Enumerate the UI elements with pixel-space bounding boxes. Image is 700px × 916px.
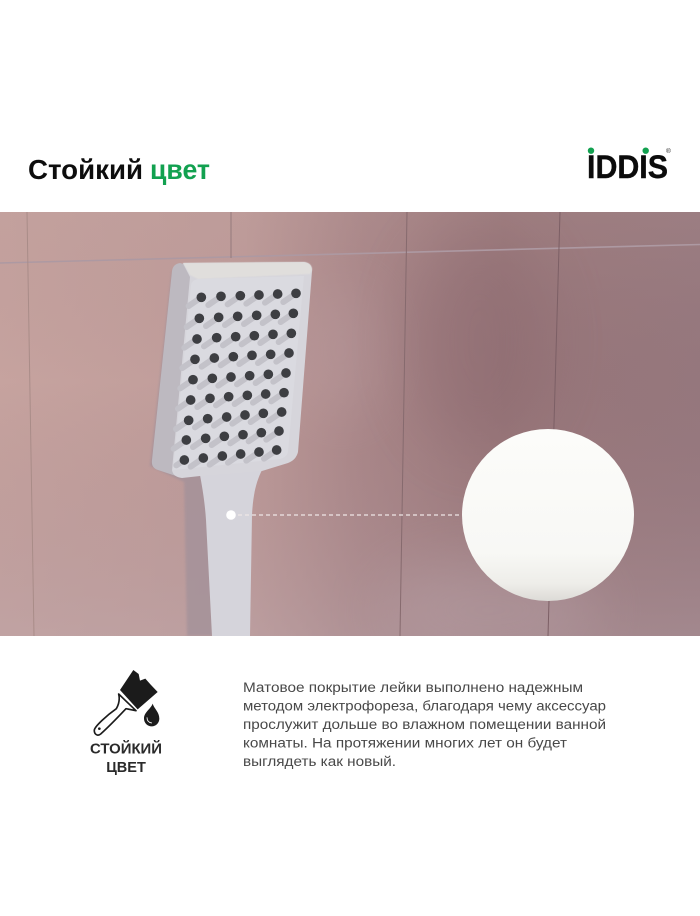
head wall shadow [150,268,214,636]
bristles [120,670,158,709]
icon label: ЦВЕТ [106,760,146,776]
brush handle [94,694,136,735]
icon label: СТОЙКИЙ [90,740,162,758]
head side [152,263,190,476]
paint drop [144,704,159,726]
head rim [172,262,312,478]
description text: выглядеть как новый. [243,754,396,770]
colour swatch circle [462,429,634,601]
title: Стойкий [28,154,143,185]
nozzles [179,288,301,465]
logo: IDDIS: ® [666,147,671,155]
shower head [150,262,312,636]
description text: Матовое покрытие лейки выполнено надежным [243,680,583,696]
logo: IDDIS: IDDIS [587,149,668,185]
inner face [173,276,304,470]
title [28,154,210,185]
handle [199,470,262,636]
callout: marker dot and dashed leader [226,510,462,520]
description text: методом электрофореза, благодаря чему аксессуар [243,698,606,714]
description text: прослужит дольше во влажном помещении ванной [243,717,606,733]
icon label [90,740,162,776]
icon: paint brush and drop [94,670,159,735]
nozzle shadows [174,293,296,467]
description text: комнаты. На протяжении многих лет он будет [243,736,568,752]
wall background [0,212,700,660]
description text [243,680,606,770]
photo: shower head on tiled wall [0,212,700,660]
title: цвет [150,154,210,185]
